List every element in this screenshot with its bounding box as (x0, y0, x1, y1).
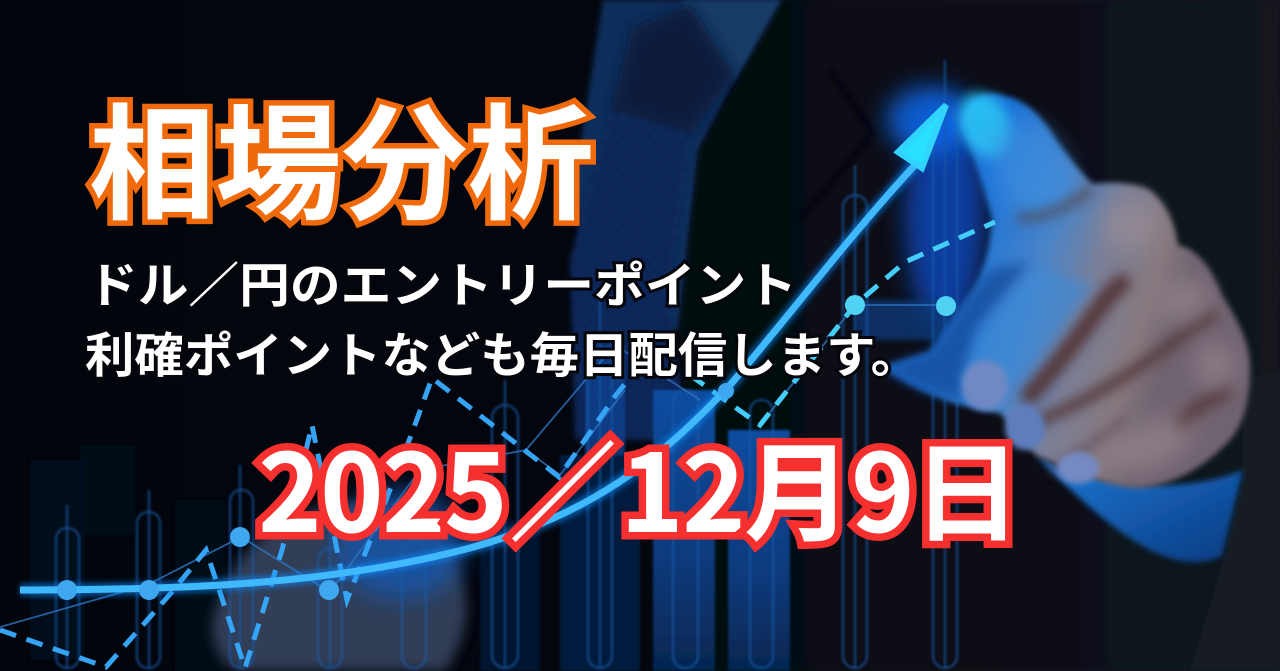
sleeve and jacket cuff (1190, 370, 1280, 671)
dashed secondary trend line (0, 222, 995, 668)
subtitle (85, 246, 920, 386)
index finger (963, 268, 1095, 403)
title: 相場分析 (89, 64, 594, 245)
thin chart lines (0, 305, 946, 627)
candlestick outlines (56, 60, 957, 668)
subtitle line 1: ドル／円のエントリーポイント (87, 246, 797, 316)
finger nails (962, 360, 1099, 484)
rising trend line with arrow (20, 105, 946, 590)
shirt cuff (1037, 457, 1243, 562)
lower-left hand silhouette (212, 490, 466, 671)
background: chart bars (30, 345, 790, 671)
finger creases (1020, 190, 1225, 470)
date: 2025／12月9日 (258, 408, 1021, 564)
glow around arrow tip (855, 86, 985, 340)
hand pointing at chart (883, 84, 1280, 671)
thumb shading (974, 109, 1086, 231)
bright thumb tip (949, 84, 1021, 166)
chart data points (57, 295, 956, 600)
knuckle highlights (1100, 200, 1235, 484)
subtitle line 2: 利確ポイントなども毎日配信します。 (85, 316, 920, 386)
palm and fist (883, 94, 1250, 488)
dark blue palm shadow (883, 262, 1030, 400)
